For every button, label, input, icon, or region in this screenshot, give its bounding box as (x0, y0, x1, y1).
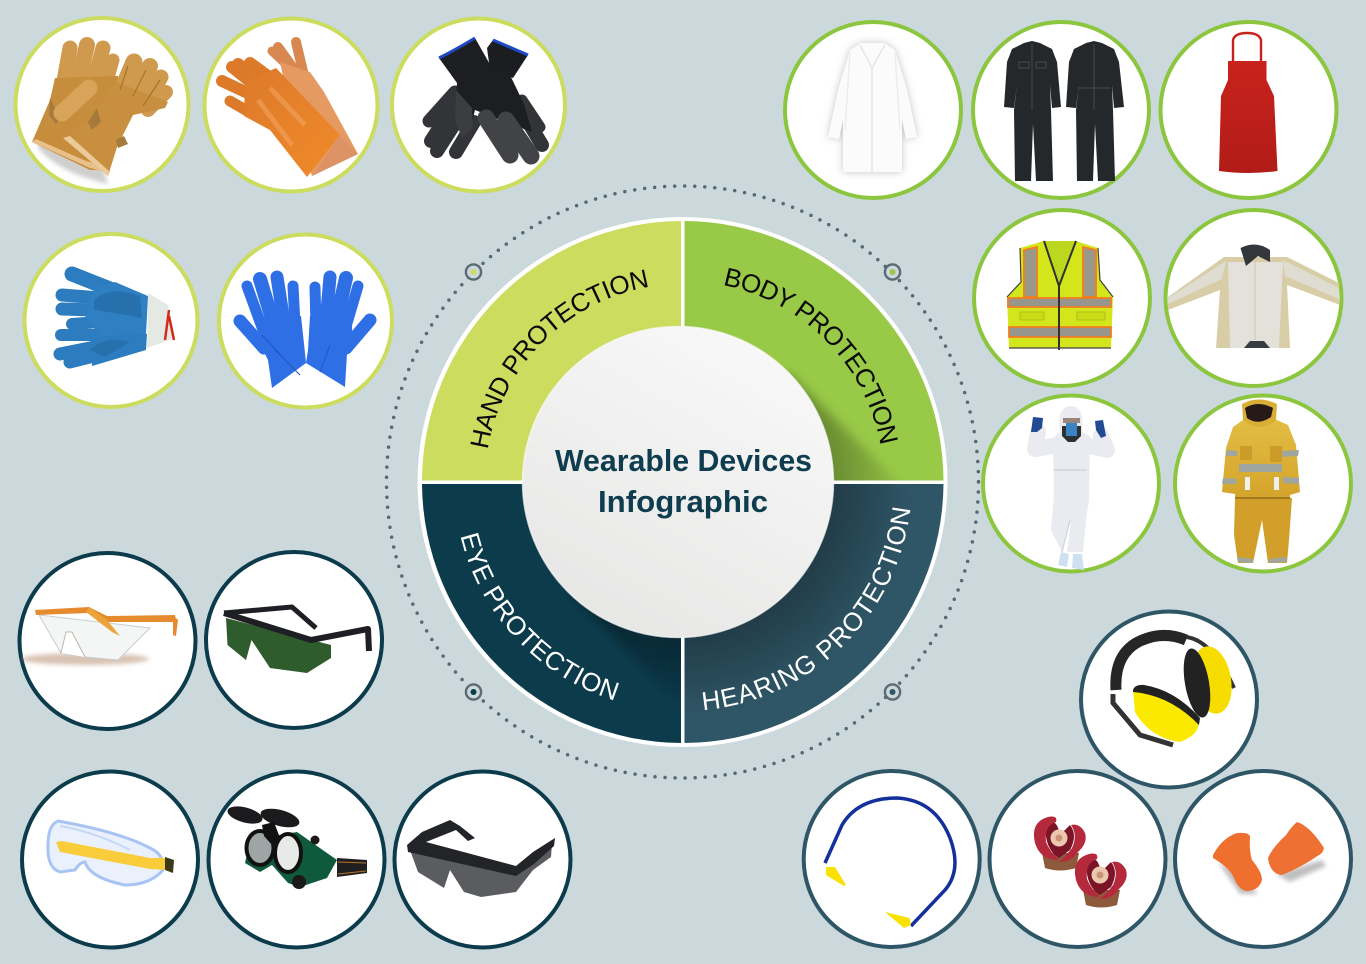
circle: green shade safety glasses (206, 552, 382, 728)
icon: green glasses (224, 607, 369, 673)
label: body protection: BODY PROTECTION (724, 268, 898, 444)
icon: leather gloves (32, 45, 168, 184)
icon: nitrile gloves (240, 277, 370, 388)
icon: firefighter suit (1222, 400, 1300, 563)
segment: hand protection (422, 221, 681, 480)
icon: welding goggles (226, 803, 367, 889)
icon: blue coated gloves (60, 274, 175, 366)
circle: red apron (1160, 22, 1336, 198)
segment: eye protection (422, 484, 681, 743)
icon: splash goggles (48, 821, 174, 885)
ring marker: body (885, 264, 900, 280)
circle: flanged red earplugs (990, 771, 1166, 947)
icon: hazmat suit (1031, 406, 1107, 570)
circle: orange foam earplugs (1175, 771, 1351, 947)
ring marker: hearing (885, 684, 900, 700)
circle: welding jacket (1166, 210, 1342, 386)
title (555, 443, 812, 519)
circle: flip-lens welding goggles (208, 772, 384, 948)
circle: leather work gloves (16, 18, 188, 191)
circle: black gloves with blue cuff (392, 18, 565, 192)
circle: white lab coat (785, 22, 961, 198)
circle: yellow earmuffs (1081, 612, 1257, 788)
icon: red apron (1219, 33, 1278, 173)
circle: blue nitrile gloves (219, 234, 392, 408)
icon: earmuffs (1113, 635, 1237, 745)
dotted orbit ring (386, 186, 978, 778)
icon: welding jacket (1168, 244, 1339, 348)
circle: firefighter turnout gear (1175, 396, 1351, 572)
icon: black gloves (429, 38, 542, 156)
label: hand protection: HAND PROTECTION (470, 270, 648, 448)
ring marker: eye (466, 684, 481, 700)
icon: smoke glasses (407, 820, 555, 897)
central wheel (418, 217, 948, 747)
circle: blue latex-coated gloves (24, 234, 198, 407)
segment: hearing protection (684, 484, 944, 743)
circle: clear orange-frame safety glasses (20, 553, 196, 729)
circle: orange rubber gloves (204, 18, 378, 192)
centre disc (522, 326, 834, 638)
title: Infographic (598, 484, 768, 519)
icon: red flanged earplugs (1034, 817, 1127, 908)
icon: headband earplugs (825, 798, 955, 928)
circle: black coveralls (973, 22, 1149, 198)
icon: lab coat (828, 43, 917, 172)
label: hearing protection: HEARING PROTECTION (702, 508, 910, 710)
icon: safety vest (1007, 241, 1113, 350)
segment: body protection (684, 221, 944, 480)
icon: foam earplugs (1213, 822, 1326, 894)
icon: orange rubber gloves (222, 42, 358, 177)
label: eye protection: EYE PROTECTION (460, 532, 619, 700)
circle: band hearing protector (804, 771, 980, 947)
icon: orange frame glasses (21, 607, 178, 665)
icon: coveralls front and back (1004, 41, 1124, 181)
circle: disposable coverall suit with respirator (983, 396, 1159, 572)
circle: clear chemical splash goggles (22, 772, 198, 948)
ring marker: hand (466, 264, 481, 280)
circle: high-visibility vest (974, 210, 1150, 386)
circle: dark smoke safety glasses (394, 772, 570, 948)
title: Wearable Devices (555, 443, 812, 478)
centre disc cast shadow (572, 370, 896, 694)
